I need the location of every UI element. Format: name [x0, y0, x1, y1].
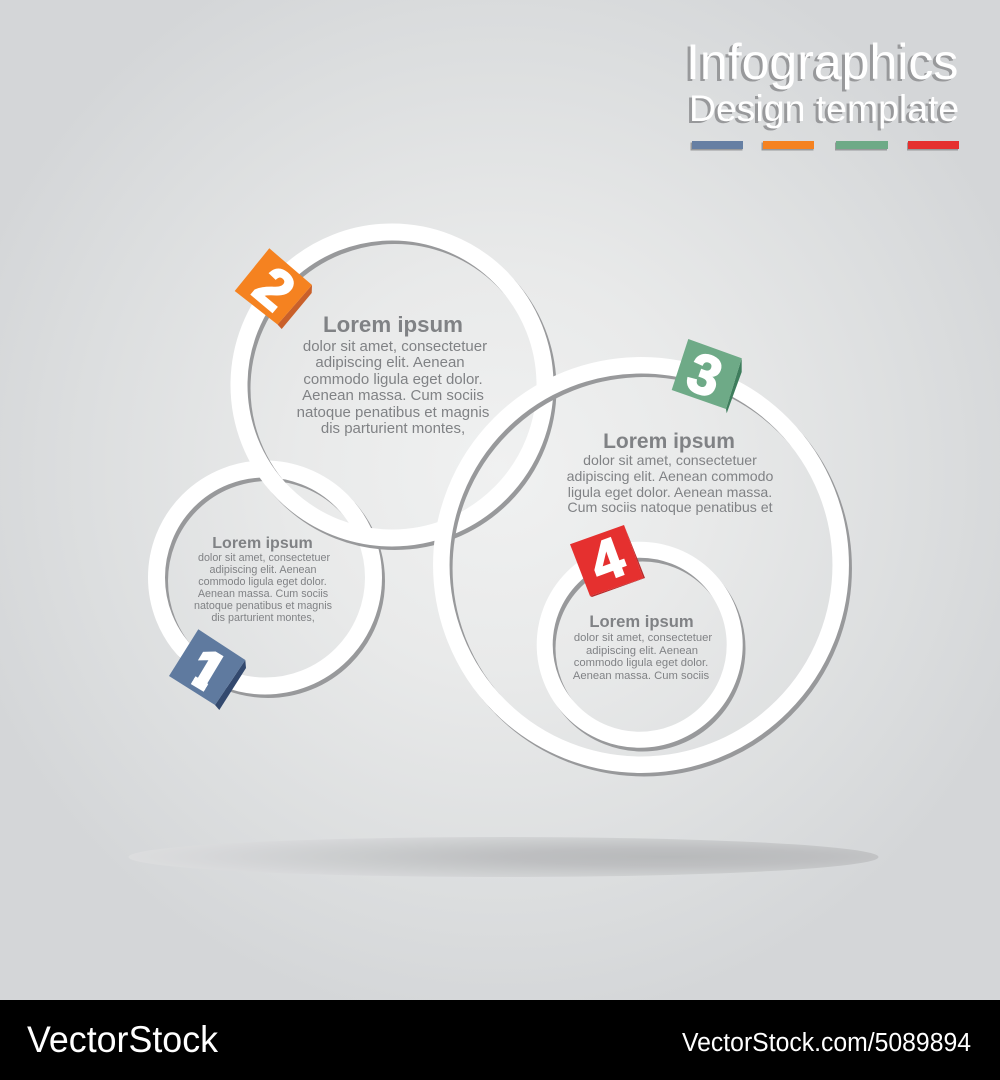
badge 4	[570, 525, 645, 597]
colour bars	[690, 141, 959, 150]
badge 4: 4	[582, 525, 633, 594]
text block 4: Aenean massa. Cum sociis	[573, 670, 710, 682]
text block 2: Lorem ipsum	[323, 312, 463, 337]
text block 1: commodo ligula eget dolor.	[198, 576, 327, 588]
text block 3: Lorem ipsum	[603, 430, 735, 453]
badge 2: 2	[242, 254, 307, 323]
text block 1: dis parturient montes,	[211, 612, 315, 624]
ring 4	[545, 550, 738, 744]
footer bar	[0, 1000, 1000, 1080]
text block 2	[297, 312, 489, 437]
text block 4	[573, 612, 712, 682]
ring 1	[156, 469, 376, 690]
text block 3: ligula eget dolor. Aenean massa.	[568, 484, 772, 500]
text block 4: commodo ligula eget dolor.	[574, 657, 708, 669]
text block 2: dis parturient montes,	[321, 420, 465, 437]
footer bar: VectorStock	[27, 1019, 218, 1060]
badge 3: 3	[679, 340, 730, 409]
text block 1: natoque penatibus et magnis	[194, 600, 332, 612]
footer bar: VectorStock.com/5089894	[682, 1029, 971, 1057]
subtitle: Design template	[689, 87, 959, 129]
badge 3	[672, 339, 742, 413]
text block 1: adipiscing elit. Aenean	[210, 564, 317, 576]
text block 3: Cum sociis natoque penatibus et	[567, 499, 773, 515]
text block 2: commodo ligula eget dolor.	[303, 371, 483, 388]
ring 3	[441, 365, 844, 768]
text block 1: dolor sit amet, consectetuer	[198, 552, 330, 564]
badge 1	[169, 629, 246, 710]
text block 3: dolor sit amet, consectetuer	[583, 452, 757, 468]
floor shadow	[128, 837, 878, 877]
text block 1: Lorem ipsum	[212, 535, 313, 552]
text block 2: adipiscing elit. Aenean	[315, 354, 465, 371]
text block 4: adipiscing elit. Aenean	[586, 645, 698, 657]
text block 4: dolor sit amet, consectetuer	[574, 632, 712, 644]
text block 3: adipiscing elit. Aenean commodo	[567, 468, 773, 484]
title: Infographics	[686, 34, 958, 90]
text block 4: Lorem ipsum	[589, 612, 694, 631]
text block 3	[567, 430, 773, 515]
text block 2: natoque penatibus et magnis	[297, 404, 489, 421]
text block 1: Aenean massa. Cum sociis	[198, 588, 328, 600]
text block 1	[194, 535, 332, 624]
badge 1: 1	[179, 637, 235, 704]
text block 2: dolor sit amet, consectetuer	[303, 338, 487, 355]
text block 2: Aenean massa. Cum sociis	[302, 387, 484, 404]
ring 2	[239, 232, 548, 542]
